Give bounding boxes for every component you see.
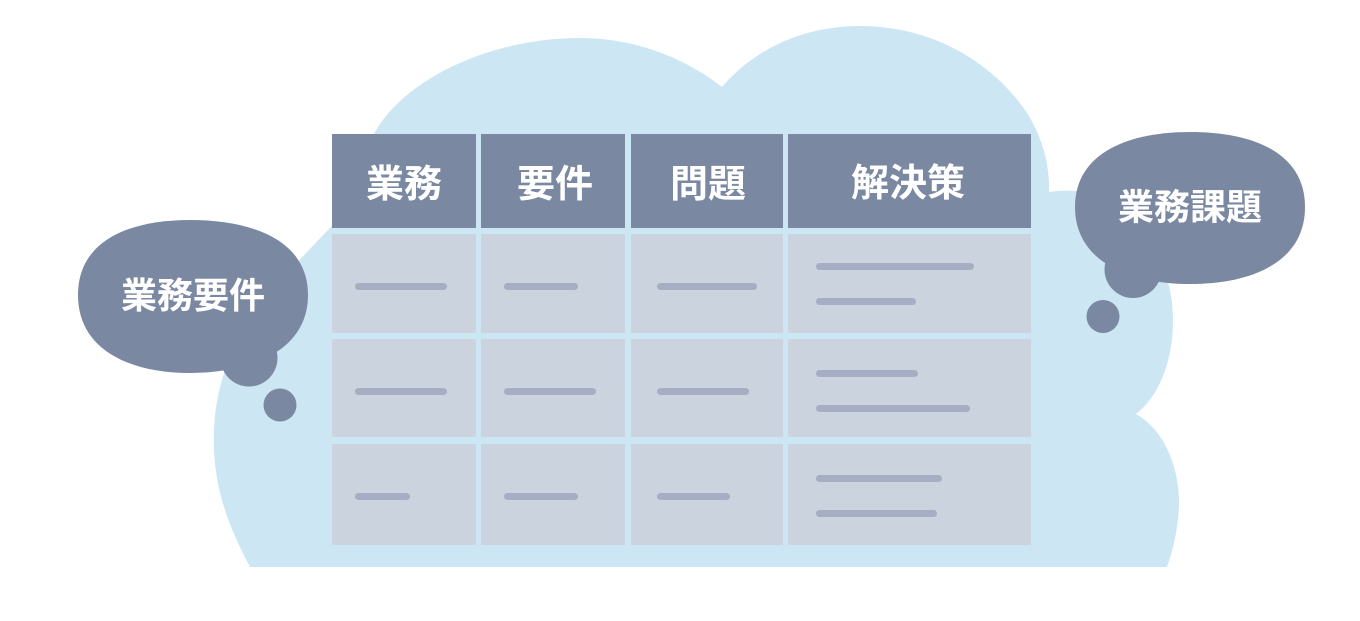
row 1 [332, 234, 1031, 333]
header cell: 業務 [332, 134, 476, 228]
header cell: 問題 [631, 134, 783, 228]
thought bubble: 業務要件 [78, 220, 308, 422]
thought bubble: 業務課題: 業務課題 [1118, 186, 1262, 228]
header cell: 業務: 業務 [366, 164, 442, 206]
thought bubble: 業務課題 [1075, 132, 1305, 333]
cloud background [214, 26, 1179, 567]
row 2 [332, 339, 1031, 437]
table [332, 134, 1031, 545]
row 3 [332, 444, 1031, 545]
header cell: 問題: 問題 [670, 164, 746, 206]
header cell: 解決策: 解決策 [851, 163, 965, 205]
header cell: 要件 [481, 134, 625, 228]
thought bubble: 業務要件: 業務要件 [121, 275, 265, 316]
header cell: 要件: 要件 [517, 164, 593, 206]
header cell: 解決策 [788, 134, 1031, 228]
